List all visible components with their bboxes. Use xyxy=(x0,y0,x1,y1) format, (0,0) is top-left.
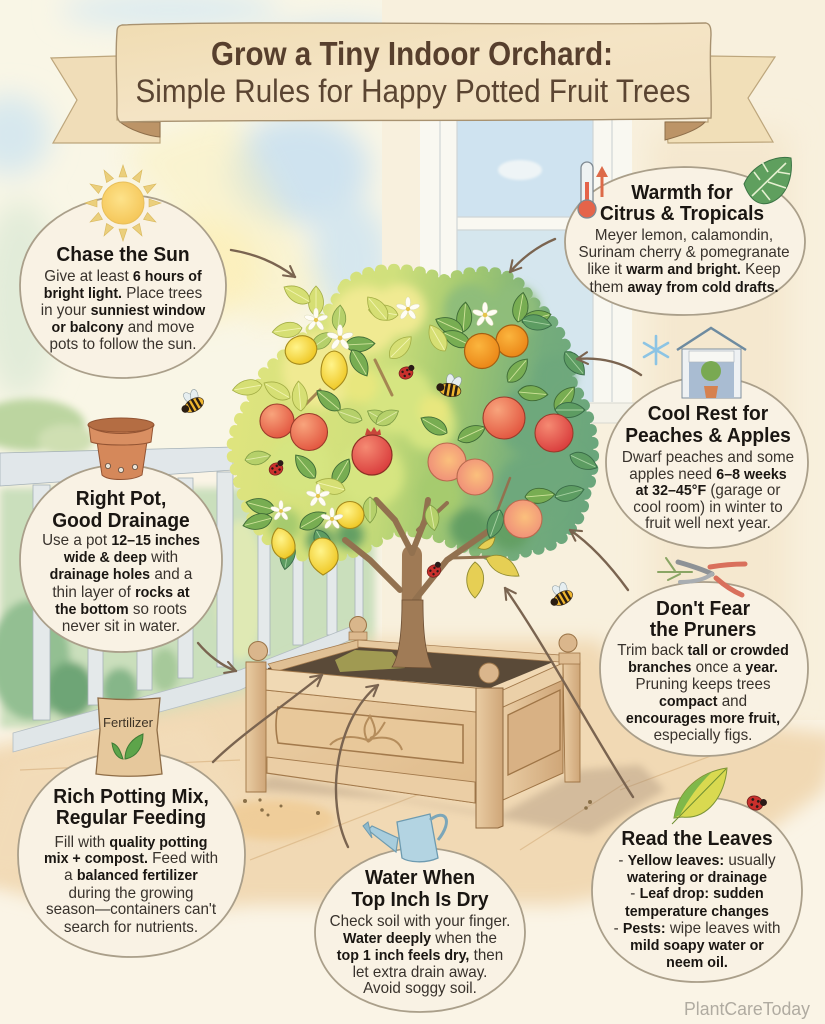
body text: the bottom so roots xyxy=(55,601,187,618)
citrus lemons xyxy=(272,331,364,575)
body text: encourages more fruit, xyxy=(626,711,780,727)
icon: garage xyxy=(677,328,746,398)
heading: Peaches & Apples xyxy=(625,425,791,447)
front corner post xyxy=(476,688,503,828)
panel: potting mix xyxy=(18,698,245,957)
panel: pruners xyxy=(600,558,808,756)
panel: right pot xyxy=(20,418,222,652)
body text: search for nutrients. xyxy=(64,919,198,936)
panel: warmth for citrus xyxy=(565,157,805,315)
body text: watering or drainage xyxy=(626,870,767,886)
body text xyxy=(622,449,794,532)
panel: chase the sun xyxy=(20,165,226,378)
heading: Citrus & Tropicals xyxy=(600,203,764,225)
heading xyxy=(52,488,190,532)
body text xyxy=(42,532,200,635)
wooden planter xyxy=(243,600,592,828)
icon: sun xyxy=(85,165,161,241)
body text xyxy=(578,227,790,296)
fruit tree xyxy=(231,269,600,650)
icon: fertilizer bag xyxy=(96,698,162,776)
body text: branches once a year. xyxy=(628,659,778,676)
heading xyxy=(600,182,764,225)
ribbon body xyxy=(116,23,711,122)
heading xyxy=(351,867,489,911)
icon: thermometer xyxy=(578,162,608,218)
body text: especially figs. xyxy=(654,727,752,744)
canopy base xyxy=(232,269,594,557)
body text: Fill with quality potting xyxy=(55,834,207,851)
body text: temperature changes xyxy=(625,904,769,920)
body text: Pruning keeps trees xyxy=(635,676,771,693)
body text xyxy=(330,913,510,997)
panel: cool rest xyxy=(606,328,808,548)
body text: cool room) in winter to xyxy=(633,499,783,516)
body text: neem oil. xyxy=(666,955,728,971)
canopy colour washes xyxy=(269,284,584,554)
body text: thin layer of rocks at xyxy=(52,584,190,601)
body text: mix + compost. Feed with xyxy=(44,850,218,867)
body text: apples need 6–8 weeks xyxy=(629,466,787,483)
window xyxy=(416,118,642,423)
body text: Surinam cherry & pomegranate xyxy=(578,244,790,261)
body text: Trim back tall or crowded xyxy=(617,642,789,659)
long front panel xyxy=(265,690,476,803)
body text: them away from cold drafts. xyxy=(589,279,779,296)
title line 1: Grow a Tiny Indoor Orchard: xyxy=(211,35,613,72)
pomegranate xyxy=(352,427,392,475)
heading: Read the Leaves xyxy=(621,828,773,850)
trunk base xyxy=(392,600,432,668)
heading: Water When xyxy=(365,867,475,889)
wall xyxy=(382,0,825,720)
body text: bright light. Place trees xyxy=(44,285,202,302)
red and peach apples xyxy=(260,397,573,452)
ladybugs and bees xyxy=(175,364,576,610)
title banner xyxy=(51,23,775,143)
heading: Cool Rest for xyxy=(648,403,769,425)
hanging yellow leaves xyxy=(467,537,519,598)
heading: Warmth for xyxy=(631,182,733,204)
icon: snowflake xyxy=(644,336,668,364)
oranges xyxy=(464,325,528,368)
heading: Good Drainage xyxy=(52,510,190,532)
heading: Regular Feeding xyxy=(56,807,206,829)
icon: pruning shears xyxy=(658,558,745,595)
heading xyxy=(53,786,209,829)
arrows xyxy=(198,239,641,847)
body text xyxy=(614,852,780,971)
distant foliage xyxy=(0,399,375,728)
scattered soil xyxy=(243,798,592,816)
body text: Dwarf peaches and some xyxy=(622,449,794,466)
panel: read the leaves xyxy=(592,768,802,982)
body text: like it warm and bright. Keep xyxy=(587,261,781,278)
icon: monstera leaf xyxy=(744,157,791,204)
side panel xyxy=(503,680,563,800)
sky wash xyxy=(0,0,430,460)
body text: Use a pot 12–15 inches xyxy=(42,532,200,549)
body text: season—containers can't xyxy=(46,901,217,918)
body text: Avoid soggy soil. xyxy=(363,980,477,997)
body text xyxy=(617,642,789,744)
soil xyxy=(268,645,558,688)
heading: Right Pot, xyxy=(76,488,166,510)
icon: leaf xyxy=(672,768,727,824)
title line 2: Simple Rules for Happy Potted Fruit Trees xyxy=(136,73,690,109)
back right post xyxy=(563,662,580,782)
heading xyxy=(650,598,756,641)
heading: the Pruners xyxy=(650,619,756,641)
panel: watering xyxy=(315,814,525,1012)
heading: Chase the Sun xyxy=(56,244,190,266)
body text: - Yellow leaves: usually xyxy=(618,852,776,869)
trunk and branches xyxy=(305,360,510,650)
body text: during the growing xyxy=(69,885,193,902)
heading xyxy=(625,403,791,447)
body text: Meyer lemon, calamondin, xyxy=(595,227,773,244)
body text: never sit in water. xyxy=(62,618,180,635)
body text: compact and xyxy=(659,693,747,710)
body text: a balanced fertilizer xyxy=(64,867,198,884)
floor xyxy=(0,640,825,920)
heading: Don't Fear xyxy=(656,598,750,620)
body text: mild soapy water or xyxy=(630,938,764,954)
body text xyxy=(44,834,218,936)
back post finial xyxy=(349,616,367,640)
body text: top 1 inch feels dry, then xyxy=(337,947,503,964)
body text: or balcony and move xyxy=(52,319,194,336)
heading: Top Inch Is Dry xyxy=(351,889,489,911)
icon: ladybug xyxy=(745,793,768,814)
watermark: PlantCareToday xyxy=(684,999,810,1019)
leaves xyxy=(231,281,600,571)
heading: Rich Potting Mix, xyxy=(53,786,209,808)
body text: drainage holes and a xyxy=(50,566,193,583)
body text: Water deeply when the xyxy=(343,930,497,947)
icon: watering can xyxy=(363,814,446,862)
body text: - Leaf drop: sudden xyxy=(630,885,764,902)
railing xyxy=(0,447,363,752)
body text: let extra drain away. xyxy=(353,964,487,981)
body text: in your sunniest window xyxy=(41,302,206,319)
body text: pots to follow the sun. xyxy=(50,336,196,353)
right ribbon tail xyxy=(666,56,775,143)
body text: - Pests: wipe leaves with xyxy=(614,920,780,937)
body text: Check soil with your finger. xyxy=(330,913,510,930)
body text: at 32–45°F (garage or xyxy=(636,482,780,499)
carved ornament xyxy=(330,716,402,750)
blossoms xyxy=(270,297,498,530)
body text xyxy=(41,268,206,353)
left post xyxy=(246,662,266,792)
body text: wide & deep with xyxy=(63,549,178,566)
left ribbon tail xyxy=(51,56,160,143)
body text: fruit well next year. xyxy=(645,515,771,532)
icon: terracotta pot xyxy=(88,418,154,480)
body text: Give at least 6 hours of xyxy=(44,268,202,285)
peaches xyxy=(428,443,542,538)
bag label: Fertilizer xyxy=(103,715,154,730)
